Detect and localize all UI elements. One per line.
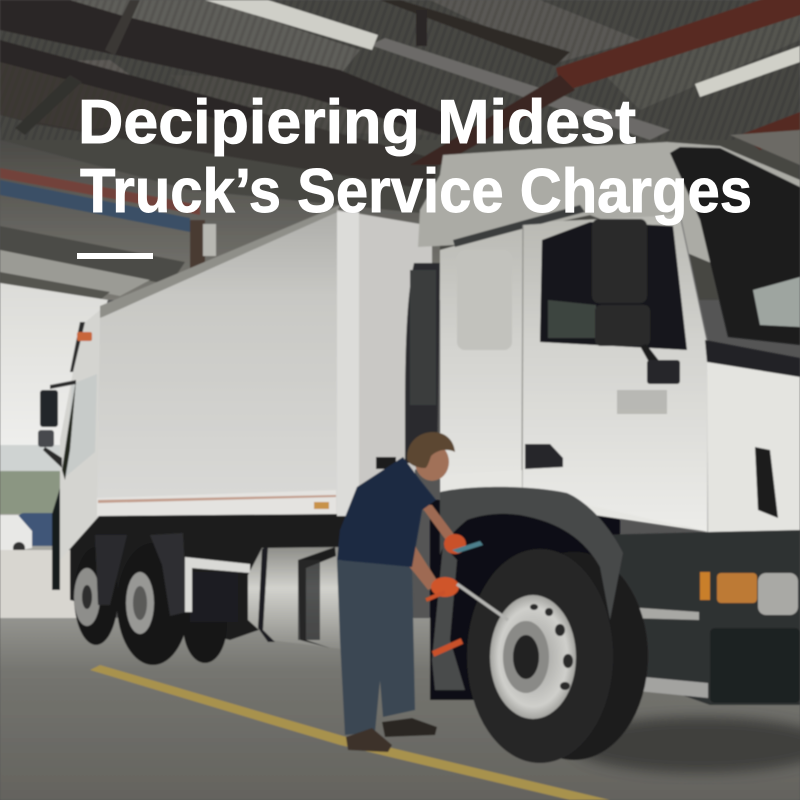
main truck: spoiler trim [453, 205, 585, 247]
mechanic shirt [337, 457, 436, 567]
main truck: door handle [525, 444, 563, 469]
main truck: upper step [628, 607, 699, 620]
main truck: windshield [670, 147, 800, 377]
wrench [426, 584, 508, 654]
main truck: door panel [522, 215, 708, 532]
mechanic jeans [337, 560, 415, 735]
rear truck: chassis shadow [70, 512, 345, 640]
rear truck: fuel tank [248, 546, 350, 650]
mechanic head [407, 432, 455, 481]
bright doorway and outside yard [0, 283, 110, 622]
rear truck: rear dual wheels [117, 543, 227, 665]
floor stain under truck [570, 717, 800, 773]
garage ceiling [0, 0, 800, 300]
main truck: wheel arch shadow [430, 500, 620, 700]
rear truck: side rail and panel [185, 557, 250, 622]
main truck: headlights and amber lights [590, 557, 798, 615]
yellow floor line [90, 665, 610, 800]
main truck: bumper [710, 628, 800, 703]
ceiling lights [205, 0, 800, 97]
title: Decipiering Midest [78, 88, 636, 157]
mechanic arms [380, 505, 456, 590]
mechanic gloves [431, 534, 466, 597]
main truck: roof spoiler [418, 142, 800, 300]
rear truck: front wheel [74, 547, 118, 645]
back wall [0, 140, 440, 300]
main truck: mudflap [432, 545, 465, 690]
main truck: front wheel [467, 549, 648, 763]
main truck: door badge [617, 390, 667, 414]
shop floor [0, 618, 800, 800]
rear truck: front fender [95, 535, 127, 605]
main truck: door seams [457, 215, 708, 532]
main truck: lower step [623, 675, 708, 698]
main truck: wheel fender [440, 487, 623, 620]
mechanic shoes [346, 718, 437, 752]
title underline [77, 253, 153, 259]
main truck: front lower body [600, 530, 800, 705]
main truck: side vent [405, 263, 440, 463]
title: Truck’s Service Charges [80, 157, 752, 226]
tablet [452, 541, 483, 553]
rear truck: small cab [38, 310, 100, 590]
main truck: side window [540, 222, 687, 350]
main truck: lower front panel [707, 355, 800, 535]
main truck: cab lower sill [440, 470, 708, 532]
title [78, 88, 752, 226]
mechanic [337, 432, 508, 752]
main truck: side mirrors [592, 219, 680, 384]
main truck: front vent [755, 447, 778, 518]
rear truck: cargo box [97, 205, 432, 516]
main truck: cab body [440, 215, 708, 530]
rear truck: mudguard [150, 533, 187, 616]
